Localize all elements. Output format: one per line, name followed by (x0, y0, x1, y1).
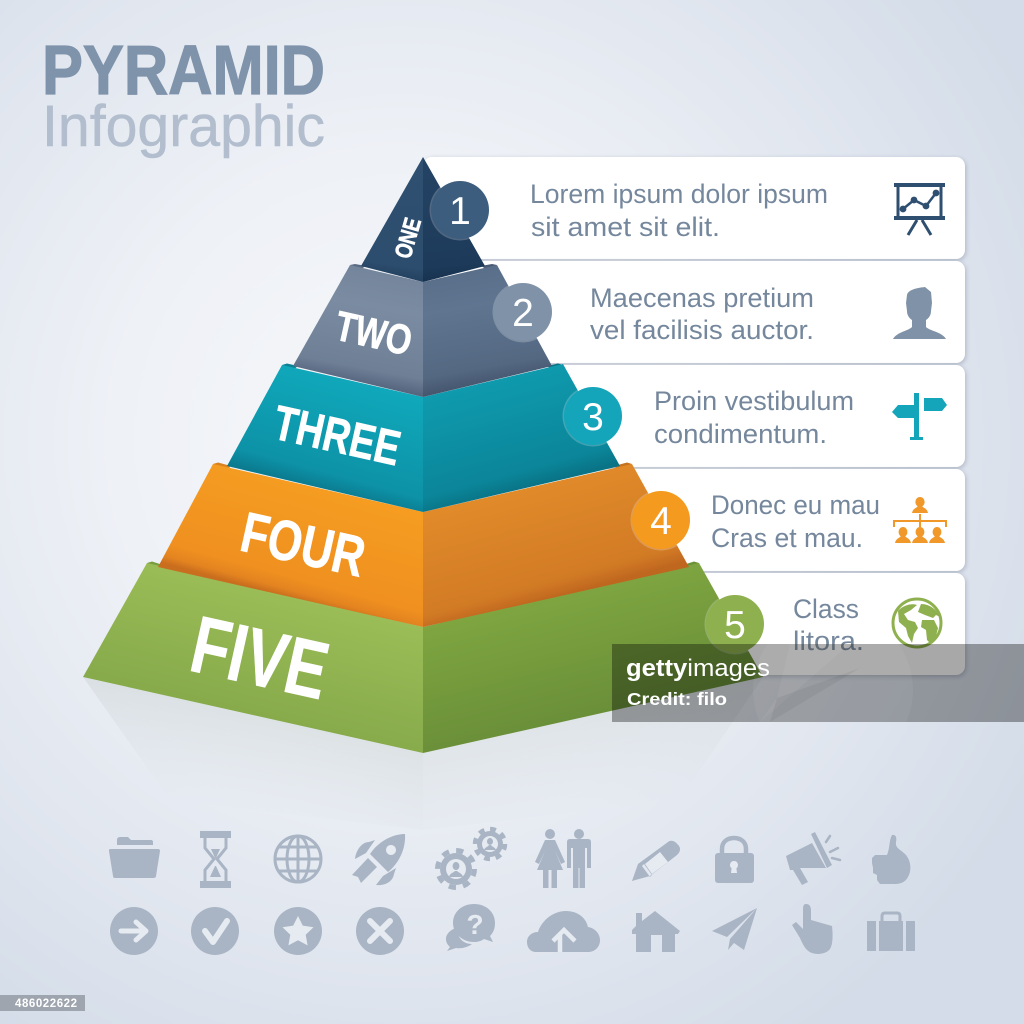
icon: thumbs up (872, 835, 910, 884)
icon: hourglass (200, 831, 231, 888)
icon row 2 (110, 904, 915, 955)
badge 5: 5 (724, 604, 746, 647)
badge 4 (630, 490, 692, 550)
icon: globe (893, 599, 941, 647)
tier: four (158, 462, 689, 627)
tier: two (293, 264, 552, 397)
label: four: FOUR (235, 500, 371, 590)
icon: organisation chart (893, 497, 947, 543)
icon: folder (109, 837, 160, 878)
pyramid (83, 157, 763, 753)
icon: briefcase (867, 913, 915, 951)
text 5: Class (793, 594, 859, 624)
icon: pointing hand (792, 904, 833, 954)
text 4: Cras et mau. (711, 523, 863, 553)
icon: presentation board (894, 183, 945, 235)
text 3: condimentum. (654, 419, 827, 449)
panel: text cards (423, 157, 965, 675)
watermark (612, 644, 1024, 722)
icon: house (632, 911, 680, 952)
card 1 (423, 157, 965, 259)
text 1: sit amet sit elit. (531, 212, 720, 242)
icon: person (893, 287, 946, 339)
label: five: FIVE (183, 600, 336, 717)
badge 5 (704, 594, 766, 654)
card 2 (423, 261, 965, 363)
icon: question chat bubbles (446, 904, 495, 951)
icon row 1 (109, 829, 910, 888)
reflection (83, 677, 763, 830)
badge 2 (492, 282, 554, 342)
tier labels (183, 215, 427, 717)
label: one: ONE (390, 215, 427, 262)
icon: couple (535, 829, 591, 888)
icon: paper plane (712, 908, 757, 950)
tier: five (83, 562, 763, 753)
icon: arrow circle (110, 907, 158, 955)
icon: check circle (191, 907, 239, 955)
icon: globe outline (275, 836, 321, 882)
card 5 (423, 573, 965, 675)
icon: cloud upload (527, 911, 600, 952)
card texts (530, 179, 880, 656)
text 2: Maecenas pretium (590, 283, 814, 313)
label: two: TWO (331, 302, 416, 364)
text 1: Lorem ipsum dolor ipsum (530, 179, 828, 209)
watermark credit: Credit: filo (627, 689, 727, 709)
text 4: Donec eu mau (711, 490, 880, 520)
icon: rocket (352, 834, 405, 885)
icon: pencil (632, 841, 680, 881)
icon: padlock (715, 838, 754, 883)
badge 3 (562, 386, 624, 446)
tier: one (361, 157, 485, 282)
badge 1: 1 (449, 190, 471, 233)
text 5: litora. (793, 626, 864, 656)
card 3 (423, 365, 965, 467)
label: three: THREE (269, 396, 405, 476)
icon: cross circle (356, 907, 404, 955)
title: PYRAMID (42, 31, 325, 109)
badge 2: 2 (512, 292, 534, 335)
number badges (430, 180, 766, 654)
title: Infographic (42, 94, 325, 159)
card 4 (423, 469, 965, 571)
icon: signpost (892, 393, 947, 440)
image id tag (0, 995, 85, 1011)
watermark logo: gettyimages (626, 655, 770, 682)
title (42, 31, 325, 159)
icon: star circle (274, 907, 322, 955)
badge 3: 3 (582, 396, 604, 439)
icon: question chat bubbles: ? (466, 909, 484, 940)
image id tag: 486022622 (15, 998, 77, 1010)
icon: megaphone (786, 832, 840, 885)
badge 1 (430, 180, 490, 240)
text 3: Proin vestibulum (654, 386, 854, 416)
tier: three (227, 364, 620, 512)
text 2: vel facilisis auctor. (590, 315, 814, 345)
badge 4: 4 (650, 500, 672, 543)
icon: gears with people (438, 829, 505, 888)
